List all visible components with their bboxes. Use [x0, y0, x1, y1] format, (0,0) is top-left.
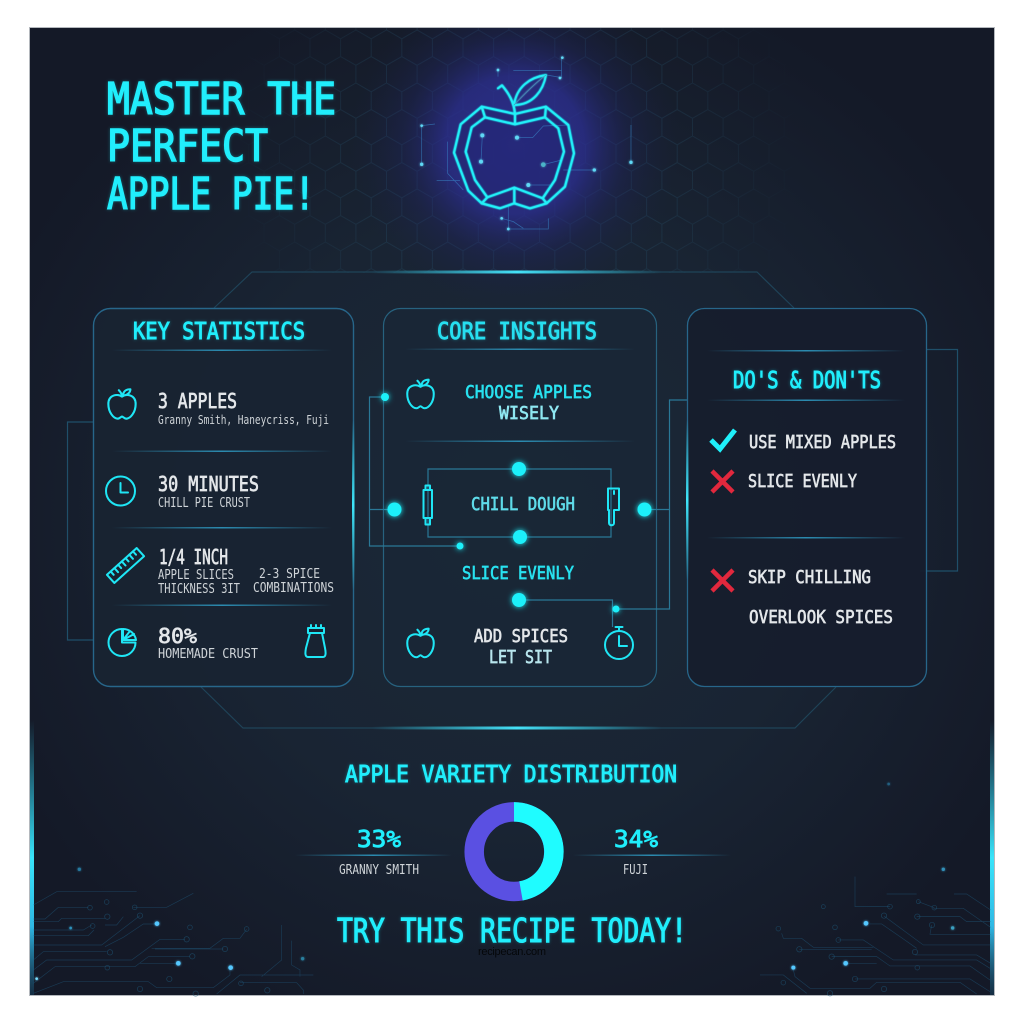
insight: slice evenly: SLICE EVENLY [462, 563, 574, 584]
icon: pie chart [108, 629, 136, 656]
panel: key statistics [94, 308, 354, 686]
hexagon grid backdrop [284, 28, 746, 273]
icon: neon circuit apple [420, 56, 633, 230]
icon: cleaver [608, 488, 619, 525]
icon: apple [407, 380, 434, 408]
insight: add spices, let sit [474, 626, 568, 668]
title: PERFECT [107, 121, 268, 172]
title: MASTER THE [107, 74, 336, 125]
panel: core insights [370, 308, 687, 686]
stat: 30 minutes [158, 472, 259, 511]
stat: spice combinations [253, 566, 334, 596]
donut chart [474, 812, 554, 892]
stat: spice combinations: 2-3 SPICE [259, 566, 320, 582]
stat: quarter inch: THICKNESS 3IT [158, 581, 240, 597]
stat: 30 minutes: CHILL PIE CRUST [158, 495, 250, 511]
stat: 3 apples [158, 389, 329, 427]
heading: do's and don'ts: DO'S & DON'TS [733, 366, 881, 394]
insight: add spices, let sit: ADD SPICES [474, 626, 568, 647]
circuit traces: bottom left [33, 868, 313, 996]
stat: 3 apples: 3 APPLES [158, 389, 237, 413]
stat: fuji share: 34% [614, 825, 658, 853]
stat: granny smith share [295, 825, 452, 878]
title [107, 74, 336, 220]
icon: check mark [711, 430, 735, 449]
heading: core insights: CORE INSIGHTS [437, 317, 597, 345]
stat: 80 percent: HOMEMADE CRUST [158, 646, 258, 662]
stat: quarter inch [158, 545, 240, 597]
icon: rolling pin [424, 486, 432, 524]
stat: quarter inch: APPLE SLICES [158, 567, 234, 583]
stat: 80 percent: 80% [158, 624, 197, 648]
heading: key statistics: KEY STATISTICS [133, 317, 305, 345]
heading: apple variety distribution: APPLE VARIETY DISTRIBUTION [345, 760, 677, 788]
stat: fuji share [573, 825, 731, 878]
insight: choose apples wisely [465, 382, 592, 424]
panel: do's and don'ts [686, 308, 926, 686]
glowing side edges [30, 720, 994, 995]
icon: red cross [712, 471, 733, 492]
apple halo glow [380, 28, 649, 276]
stat: 80 percent [158, 624, 258, 662]
stat: fuji share: FUJI [623, 862, 648, 878]
stat: 3 apples: Granny Smith, Haneycriss, Fuji [158, 412, 329, 427]
insight: choose apples wisely: CHOOSE APPLES [465, 382, 592, 403]
flow nodes [381, 393, 652, 612]
trapezoid frame with glowing beams [201, 270, 836, 730]
stat: granny smith share: GRANNY SMITH [339, 862, 419, 878]
icon: spice shaker [305, 625, 326, 657]
stat: 30 minutes: 30 MINUTES [158, 472, 259, 496]
icon: apple [108, 389, 136, 419]
stat: quarter inch: 1/4 INCH [159, 545, 228, 569]
flow wires [370, 397, 687, 627]
icon: apple [407, 629, 434, 657]
watermark: recipecan.com [478, 946, 546, 958]
call to action: TRY THIS RECIPE TODAY! [337, 911, 687, 950]
icon: red cross [712, 570, 733, 591]
item: slice evenly: SLICE EVENLY [748, 471, 857, 492]
insight: add spices, let sit: LET SIT [489, 647, 552, 668]
icon: clock [106, 476, 135, 506]
item: skip chilling: SKIP CHILLING [748, 567, 871, 588]
title: APPLE PIE! [107, 169, 315, 220]
icon: stopwatch [605, 627, 633, 659]
insight: chill dough: CHILL DOUGH [471, 494, 575, 515]
connector wires behind panels [68, 350, 958, 640]
item: use mixed apples: USE MIXED APPLES [749, 432, 896, 453]
stat: spice combinations: COMBINATIONS [253, 580, 334, 596]
insight: choose apples wisely: WISELY [499, 403, 559, 424]
circuit traces: bottom right [760, 783, 991, 996]
stat: granny smith share: 33% [357, 825, 401, 853]
item: overlook spices: OVERLOOK SPICES [749, 607, 893, 628]
icon: ruler [107, 548, 144, 583]
